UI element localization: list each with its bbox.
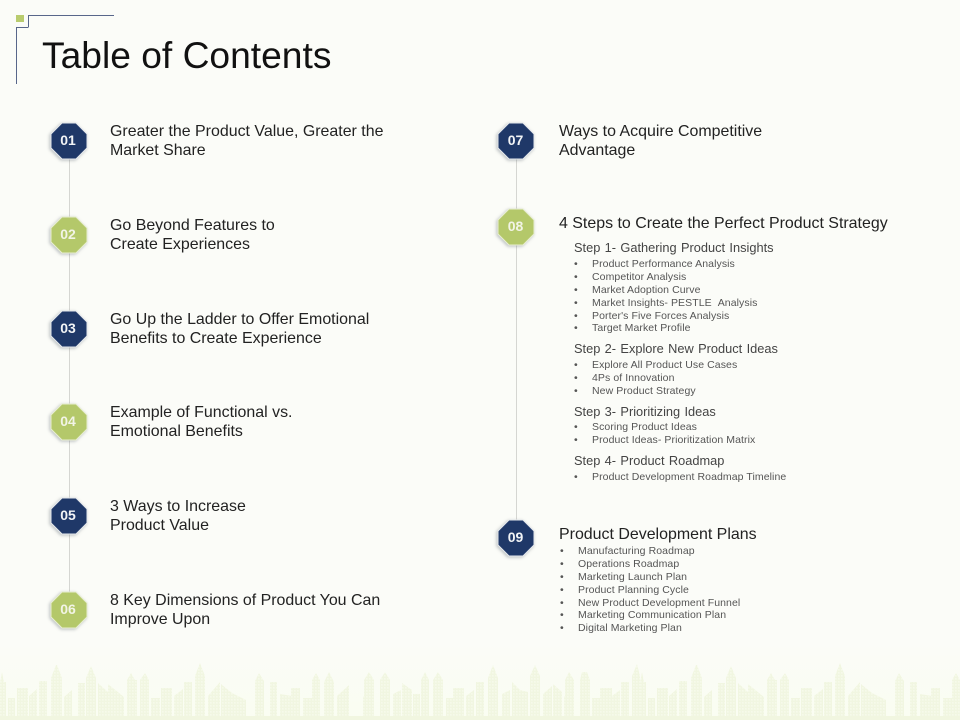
badge 03: [48, 310, 88, 350]
item 02: [48, 216, 275, 256]
text 02: [110, 217, 275, 253]
item 06: [48, 590, 380, 632]
step 1: •: [574, 258, 578, 270]
step 1: Porter's Five Forces Analysis: [592, 310, 729, 322]
step 4: •: [574, 471, 578, 483]
item 04: [48, 402, 292, 444]
text 06: 8 Key Dimensions of Product You Can: [110, 592, 380, 609]
badge 01: [48, 122, 88, 162]
list 09: Marketing Launch Plan: [578, 571, 687, 583]
text 04: [110, 404, 292, 440]
list 09: Digital Marketing Plan: [578, 622, 682, 634]
badge 04: 04: [60, 413, 76, 429]
list 09: Marketing Communication Plan: [578, 609, 726, 621]
text 03: Benefits to Create Experience: [110, 330, 322, 347]
text 02: Create Experiences: [110, 236, 250, 253]
text 05: Product Value: [110, 517, 209, 534]
step 2: •: [574, 359, 578, 371]
step 2: •: [574, 385, 578, 397]
step 3: Step 3- Prioritizing Ideas: [574, 404, 716, 418]
step 2: 4Ps of Innovation: [592, 372, 674, 384]
item 03: [48, 310, 369, 350]
list 09: •: [560, 584, 564, 596]
text 06: [110, 592, 380, 628]
title: Table of Contents: [42, 34, 331, 76]
step 1: •: [574, 271, 578, 283]
badge 02: [48, 216, 88, 256]
step 1: •: [574, 284, 578, 296]
badge 08: 08: [508, 218, 523, 234]
badge 08: [494, 208, 536, 248]
text 04: Emotional Benefits: [110, 423, 243, 440]
list 09: •: [560, 545, 564, 557]
text 01: Greater the Product Value, Greater the: [110, 123, 383, 140]
badge 09: 09: [508, 529, 523, 545]
list 09: •: [560, 558, 564, 570]
list 09: Product Planning Cycle: [578, 584, 689, 596]
text 07: Advantage: [559, 142, 635, 159]
item 05: [48, 496, 246, 538]
step 1: Step 1- Gathering Product Insights: [574, 240, 774, 254]
step 1: Target Market Profile: [592, 322, 691, 334]
item 09: [494, 518, 757, 634]
step 1: Product Performance Analysis: [592, 258, 735, 270]
badge 09: [494, 518, 536, 560]
badge 06: [48, 590, 88, 632]
text 03: Go Up the Ladder to Offer Emotional: [110, 311, 369, 328]
step 1: Market Adoption Curve: [592, 284, 700, 296]
step 3: •: [574, 421, 578, 433]
item 08: [494, 208, 888, 483]
step 3: Scoring Product Ideas: [592, 421, 697, 433]
step 2: Step 2- Explore New Product Ideas: [574, 340, 778, 356]
item 01: [48, 122, 383, 162]
text 07: Ways to Acquire Competitive: [559, 123, 762, 140]
text 01: Market Share: [110, 142, 206, 159]
item 07: [494, 122, 762, 162]
list 09: Operations Roadmap: [578, 558, 679, 570]
left timeline connector: [69, 150, 70, 610]
badge 05: 05: [60, 507, 76, 523]
step 2: New Product Strategy: [592, 385, 696, 397]
step 2: Explore All Product Use Cases: [592, 359, 737, 371]
text 06: Improve Upon: [110, 611, 210, 628]
text 07: [559, 123, 762, 159]
list 09: Manufacturing Roadmap: [578, 545, 695, 557]
badge 07: [494, 122, 536, 162]
step 4: [574, 452, 786, 483]
badge 01: 01: [60, 132, 76, 148]
list 09: •: [560, 597, 564, 609]
step 1: •: [574, 310, 578, 322]
step 1: •: [574, 297, 578, 309]
text 05: [110, 498, 246, 534]
text 01: [110, 123, 383, 159]
list 09: [560, 545, 740, 634]
step 1: Competitor Analysis: [592, 271, 686, 283]
step 4: Product Development Roadmap Timeline: [592, 471, 786, 483]
text 08 heading: 4 Steps to Create the Perfect Product Strategy: [559, 215, 888, 232]
badge 07: 07: [508, 132, 523, 148]
badge 06: 06: [60, 601, 76, 617]
step 3: •: [574, 434, 578, 446]
badge 03: 03: [60, 320, 76, 336]
text 02: Go Beyond Features to: [110, 217, 275, 234]
step 3: Product Ideas- Prioritization Matrix: [592, 434, 755, 446]
step 1: [574, 240, 774, 334]
list 09: •: [560, 609, 564, 621]
background skyline: [0, 664, 960, 720]
step 2: [574, 340, 778, 397]
text 05: 3 Ways to Increase: [110, 498, 246, 515]
badge 05: [48, 496, 88, 538]
text 03: [110, 311, 369, 347]
step 1: Market Insights- PESTLE Analysis: [592, 297, 757, 309]
step 4: Step 4- Product Roadmap: [574, 452, 724, 468]
step 2: •: [574, 372, 578, 384]
step 1: •: [574, 322, 578, 334]
list 09: •: [560, 622, 564, 634]
step 3: [574, 404, 755, 446]
badge 04: [48, 402, 88, 444]
corner bracket decoration: [16, 15, 114, 84]
badge 02: 02: [60, 226, 76, 242]
text 04: Example of Functional vs.: [110, 404, 292, 421]
text 09 heading: Product Development Plans: [559, 526, 757, 543]
list 09: New Product Development Funnel: [578, 597, 740, 609]
right timeline connector: [516, 150, 517, 530]
list 09: •: [560, 571, 564, 583]
